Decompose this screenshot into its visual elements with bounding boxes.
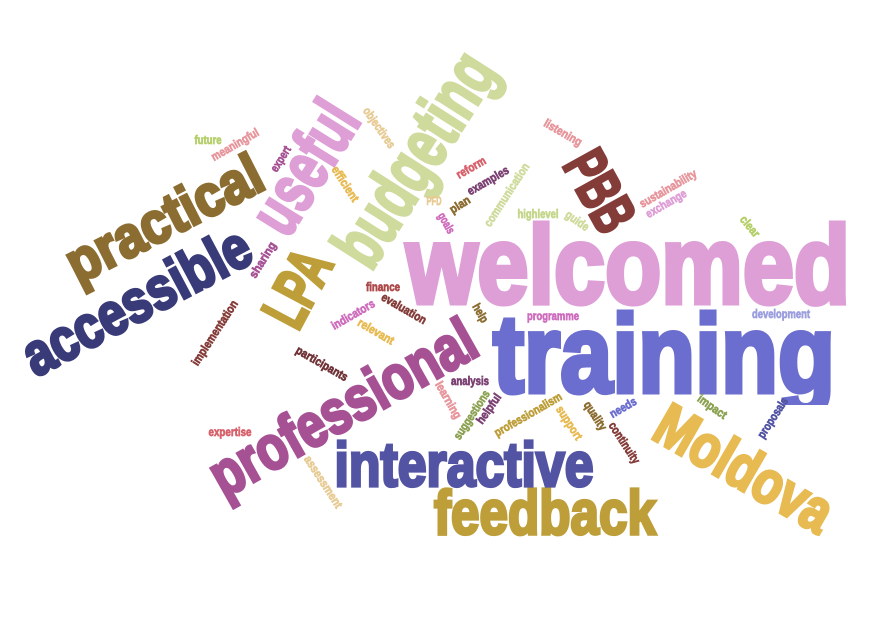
word cloud xyxy=(25,52,846,536)
word: assessment: assessment xyxy=(301,453,346,511)
word: accessible: accessible xyxy=(10,213,262,389)
word: suggestions: suggestions xyxy=(451,387,493,442)
word: development: development xyxy=(752,307,810,321)
word: clear: clear xyxy=(737,213,763,240)
word: evaluation: evaluation xyxy=(379,290,429,327)
word: relevant: relevant xyxy=(355,315,397,348)
word: needs: needs xyxy=(607,394,639,421)
word: useful: useful xyxy=(234,87,375,248)
word: meaningful: meaningful xyxy=(209,125,261,164)
word: plan: plan xyxy=(447,193,473,216)
word: PFD: PFD xyxy=(426,194,442,208)
word: programme: programme xyxy=(527,309,579,323)
word: PBB: PBB xyxy=(551,139,649,244)
word: helpful: helpful xyxy=(473,391,504,427)
word: efficient: efficient xyxy=(329,163,362,204)
word: implementation: implementation xyxy=(188,298,241,368)
word: proposals: proposals xyxy=(754,395,791,441)
word: LPA: LPA xyxy=(249,238,347,339)
word: continuity: continuity xyxy=(606,419,643,467)
word: learning: learning xyxy=(432,379,465,421)
word: impact: impact xyxy=(695,392,730,422)
word: analysis: analysis xyxy=(451,374,489,388)
word: indicators: indicators xyxy=(329,296,378,333)
word: participants: participants xyxy=(293,343,351,384)
word: future: future xyxy=(194,133,222,147)
word: practical: practical xyxy=(55,141,274,296)
word: professional: professional xyxy=(197,305,489,511)
word: quality: quality xyxy=(581,399,610,433)
word: goals: goals xyxy=(435,210,458,236)
word: listening: listening xyxy=(541,116,585,149)
word: interactive: interactive xyxy=(334,431,594,500)
word: highlevel: highlevel xyxy=(518,207,558,221)
word: help: help xyxy=(469,301,492,325)
word: professionalism: professionalism xyxy=(492,389,564,440)
word: objectives: objectives xyxy=(360,104,399,151)
word: Moldova: Moldova xyxy=(643,390,846,546)
word: feedback: feedback xyxy=(434,479,656,548)
word: communication: communication xyxy=(481,160,532,229)
word: reform: reform xyxy=(454,153,488,182)
word: sustainability: sustainability xyxy=(637,166,699,211)
word: examples: examples xyxy=(465,163,512,198)
word: finance: finance xyxy=(366,280,400,294)
word: sharing: sharing xyxy=(246,239,279,281)
word: expert: expert xyxy=(267,143,294,174)
word: expertise: expertise xyxy=(208,425,252,439)
word: exchange: exchange xyxy=(643,186,689,221)
word: support: support xyxy=(553,403,586,443)
word: guide: guide xyxy=(563,208,592,234)
